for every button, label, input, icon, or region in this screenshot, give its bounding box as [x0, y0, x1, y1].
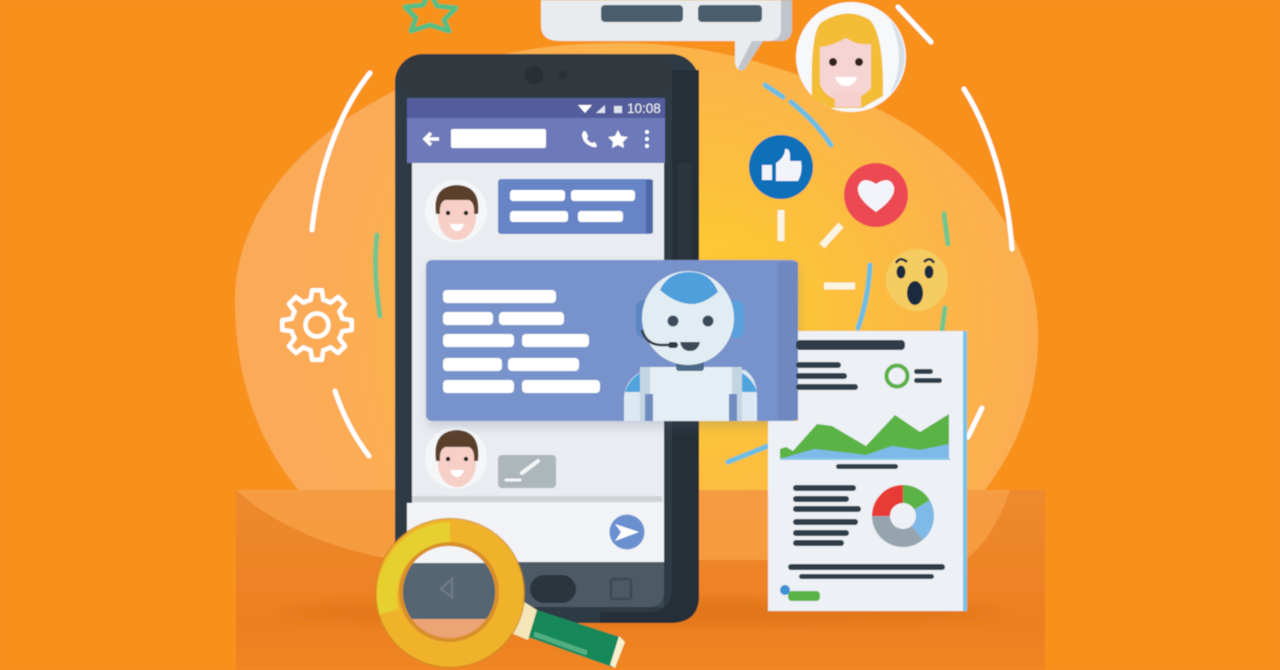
- icon: thumbs up: [749, 135, 813, 199]
- phone body: [395, 54, 699, 623]
- ring icon: [886, 366, 908, 386]
- phone: [395, 54, 699, 623]
- magnifying glass: [376, 518, 625, 668]
- bottom bezel: [407, 562, 664, 607]
- corner tag: [780, 585, 820, 601]
- icon: gear: [282, 290, 352, 360]
- status icons: [578, 105, 622, 113]
- status bar: [407, 98, 665, 118]
- robot neck: [676, 361, 704, 371]
- icon: star outline: [405, 0, 456, 31]
- icon: star: [608, 130, 628, 148]
- report header lines: [796, 340, 942, 390]
- camera: [525, 66, 543, 84]
- robot smile: [680, 342, 700, 351]
- decorative arc: blue dashes: [728, 85, 870, 462]
- decorative arc: white dashes: [312, 7, 1012, 456]
- avatar: man bottom: [425, 427, 487, 489]
- decorative arc: green dashes: [376, 214, 948, 330]
- square nav icon: [611, 579, 631, 599]
- icon: wow emoji: [886, 249, 948, 311]
- typing bubble: [498, 455, 556, 488]
- avatar: man top: [425, 180, 487, 242]
- bubble text bars: [601, 5, 762, 22]
- illustration: [234, 0, 1045, 670]
- icon: dots: [645, 130, 649, 148]
- robot hair: [660, 272, 718, 304]
- robot message card: [426, 260, 798, 426]
- title bar: [451, 129, 546, 148]
- icon: phone call: [582, 131, 597, 147]
- handle: [528, 610, 620, 667]
- icon: heart: [844, 163, 908, 227]
- background blob: [235, 43, 1038, 560]
- speech bubble (top): [541, 0, 792, 70]
- input bar: [407, 503, 664, 562]
- app bar: [407, 118, 665, 163]
- chat area: [412, 163, 664, 503]
- reaction tick marks: [781, 210, 855, 286]
- back arrow: [425, 133, 439, 145]
- card text lines: [443, 290, 600, 393]
- area chart: [780, 414, 950, 460]
- avatar: woman: [796, 2, 906, 112]
- side button: [677, 162, 693, 262]
- lens contents: [402, 561, 495, 639]
- robot arms: [624, 370, 757, 421]
- icon: send button: [610, 514, 644, 550]
- robot head: [642, 271, 734, 365]
- chart caption: [836, 464, 898, 469]
- donut chart: [881, 494, 925, 538]
- floor band: [236, 490, 1045, 670]
- text lines: [510, 190, 635, 222]
- report document: [768, 331, 967, 611]
- lens rim: [389, 532, 511, 654]
- headset mic: [642, 330, 676, 345]
- message bubble top: [498, 179, 653, 234]
- home button: [530, 575, 576, 603]
- robot: [624, 271, 757, 421]
- robot eyes: [668, 316, 678, 326]
- robot torso: [640, 367, 742, 421]
- report body lines: [788, 485, 945, 579]
- robot ears: [636, 300, 652, 338]
- status time: 10:08: [627, 101, 661, 116]
